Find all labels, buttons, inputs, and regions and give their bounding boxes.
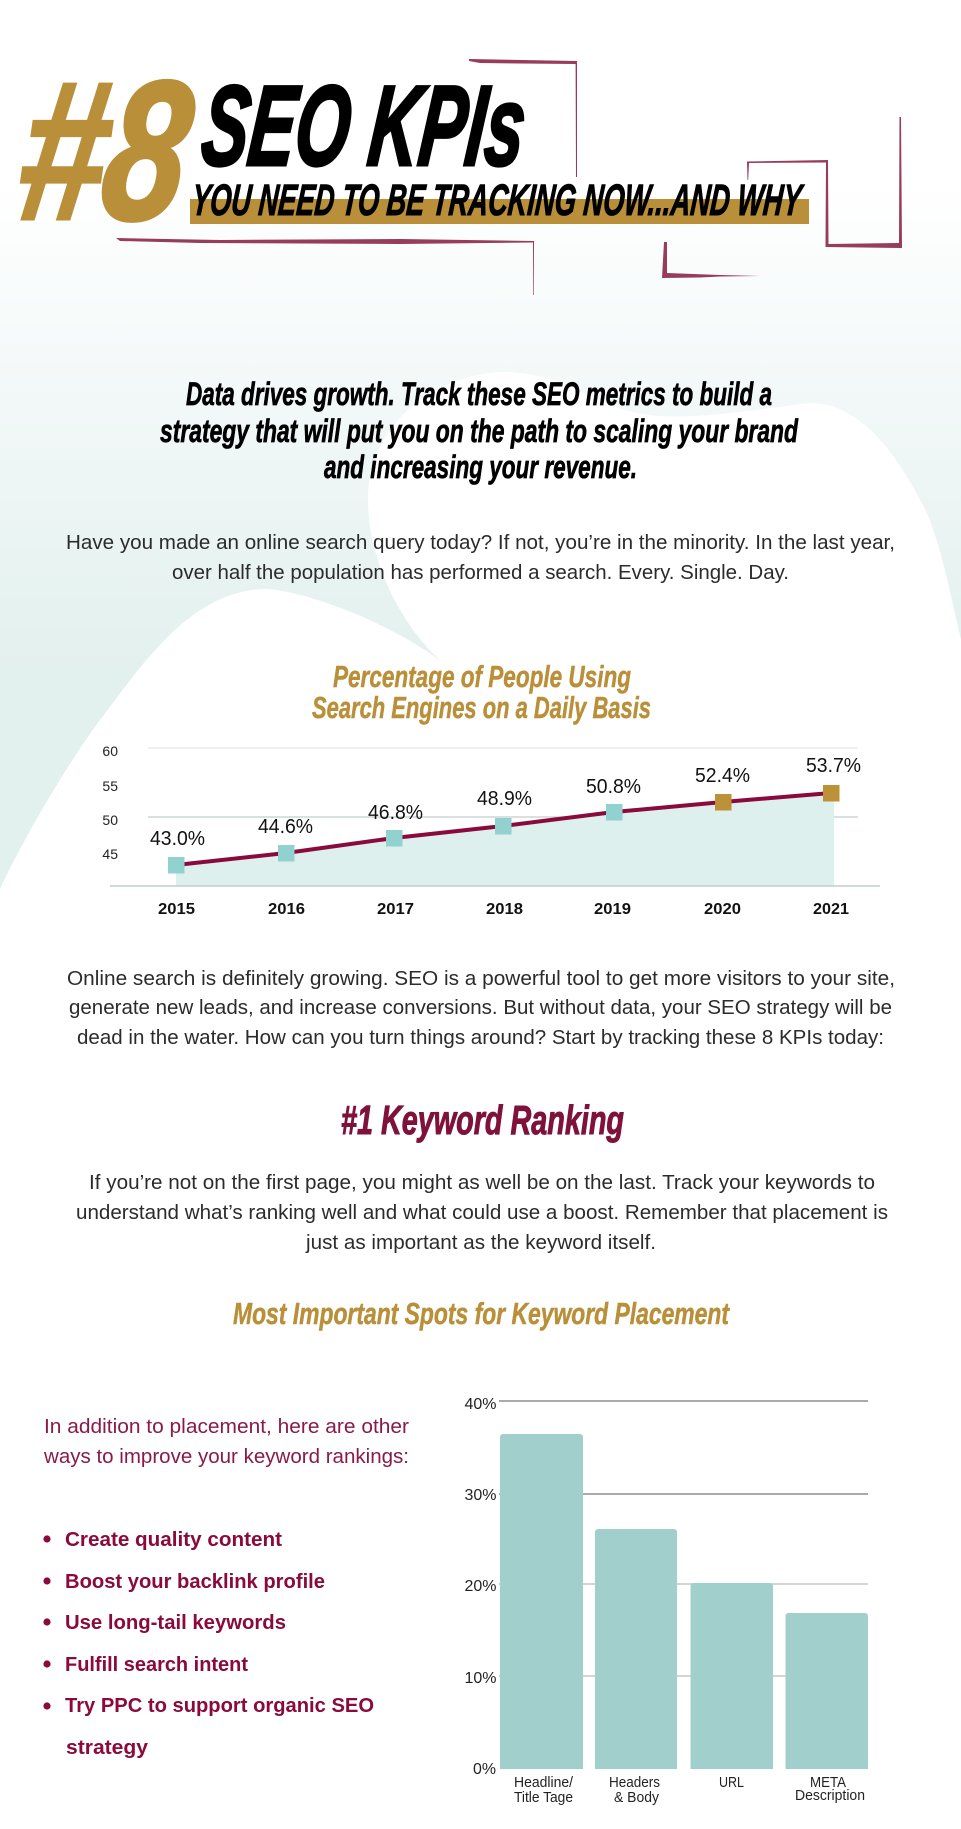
number 8: # xyxy=(5,41,124,262)
category labels: META xyxy=(810,1774,846,1791)
trend line xyxy=(176,793,831,865)
bullet list: Fulfill search intent xyxy=(65,1654,248,1676)
callout: other ways to improve: ways to improve your keyword rankings: xyxy=(43,1446,409,1468)
callout: other ways to improve xyxy=(43,1416,409,1468)
subtitle highlight bar xyxy=(190,199,809,224)
number 8: 8 xyxy=(91,41,204,262)
intro heading xyxy=(160,376,799,485)
y axis percent labels: 0% xyxy=(473,1761,496,1778)
intro paragraph: over half the population has performed a search. Every. Single. Day. xyxy=(172,561,789,584)
y axis percent labels: 40% xyxy=(464,1396,496,1413)
chart title: Search Engines on a Daily Basis xyxy=(312,690,651,725)
year labels: 2018 xyxy=(486,901,523,918)
y axis labels: 60 xyxy=(102,743,118,759)
paragraph: online search growth: generate new leads, and increase conversions. But without data, your SEO strategy will be xyxy=(69,996,892,1019)
paragraph: keyword ranking: understand what’s ranking well and what could use a boost. Remember that placement is xyxy=(76,1201,888,1224)
paragraph: keyword ranking: If you’re not on the first page, you might as well be on the last. Track your keywords to xyxy=(89,1171,875,1194)
bar chart title: Most Important Spots for Keyword Placement xyxy=(233,1296,730,1331)
value labels: 46.8% xyxy=(368,802,423,824)
value labels: 43.0% xyxy=(150,828,205,850)
bar chart: keyword placement xyxy=(464,1396,868,1806)
bars xyxy=(500,1434,868,1769)
value labels: 52.4% xyxy=(695,765,750,787)
value labels xyxy=(150,755,861,850)
data markers xyxy=(168,785,840,874)
value labels: 48.9% xyxy=(477,788,532,810)
y axis percent labels: 10% xyxy=(464,1670,496,1687)
year labels: 2020 xyxy=(704,901,741,918)
year labels xyxy=(158,901,849,918)
intro heading: and increasing your revenue. xyxy=(324,449,637,485)
y axis labels: 50 xyxy=(102,812,118,828)
headline: SEO KPIs: SEO KPIs xyxy=(196,63,532,190)
chart title xyxy=(312,659,651,725)
decorative bracket frames xyxy=(116,59,902,295)
paragraph: online search growth xyxy=(67,967,895,1049)
y axis labels: 55 xyxy=(102,778,118,794)
line chart: daily search engine use xyxy=(102,743,880,918)
area fill xyxy=(176,793,834,886)
paragraph: keyword ranking xyxy=(76,1171,888,1254)
intro paragraph xyxy=(66,531,895,584)
category labels: Headline/ xyxy=(514,1774,574,1791)
value labels: 53.7% xyxy=(806,755,861,777)
paragraph: online search growth: Online search is definitely growing. SEO is a powerful tool to get more visitors to your site, xyxy=(67,967,895,990)
paragraph: keyword ranking: just as important as the keyword itself. xyxy=(305,1231,656,1254)
bullet list: strategy xyxy=(66,1737,149,1759)
bullet list: Try PPC to support organic SEO xyxy=(65,1695,374,1717)
y axis percent labels: 30% xyxy=(464,1487,496,1504)
y axis labels: 45 xyxy=(102,846,118,862)
bullet list: Use long-tail keywords xyxy=(65,1612,286,1634)
callout: other ways to improve: In addition to placement, here are other xyxy=(44,1416,409,1438)
year labels: 2021 xyxy=(813,901,849,918)
value labels: 44.6% xyxy=(258,816,313,838)
y axis percent labels xyxy=(464,1396,496,1778)
year labels: 2016 xyxy=(268,901,305,918)
y axis percent labels: 20% xyxy=(464,1578,496,1595)
intro paragraph: Have you made an online search query today? If not, you’re in the minority. In the last year, xyxy=(66,531,895,554)
year labels: 2015 xyxy=(158,901,195,918)
category labels: URL xyxy=(719,1774,744,1791)
year labels: 2019 xyxy=(594,901,631,918)
bullet list: Create quality content xyxy=(65,1529,282,1551)
bullet list: Boost your backlink profile xyxy=(65,1571,325,1593)
bullet list xyxy=(43,1529,374,1759)
category labels: Title Tage xyxy=(514,1789,573,1806)
title xyxy=(5,41,902,295)
category labels: Headers xyxy=(609,1774,660,1791)
section heading: #1 Keyword Ranking: #1 Keyword Ranking xyxy=(341,1097,624,1143)
category labels xyxy=(514,1774,865,1806)
year labels: 2017 xyxy=(377,901,414,918)
chart title: Percentage of People Using xyxy=(333,659,631,694)
category labels: & Body xyxy=(614,1789,659,1806)
category labels: Description xyxy=(795,1787,865,1804)
value labels: 50.8% xyxy=(586,776,641,798)
y axis labels xyxy=(102,743,118,862)
paragraph: online search growth: dead in the water. How can you turn things around? Start by tracking these 8 KPIs today: xyxy=(77,1026,884,1049)
